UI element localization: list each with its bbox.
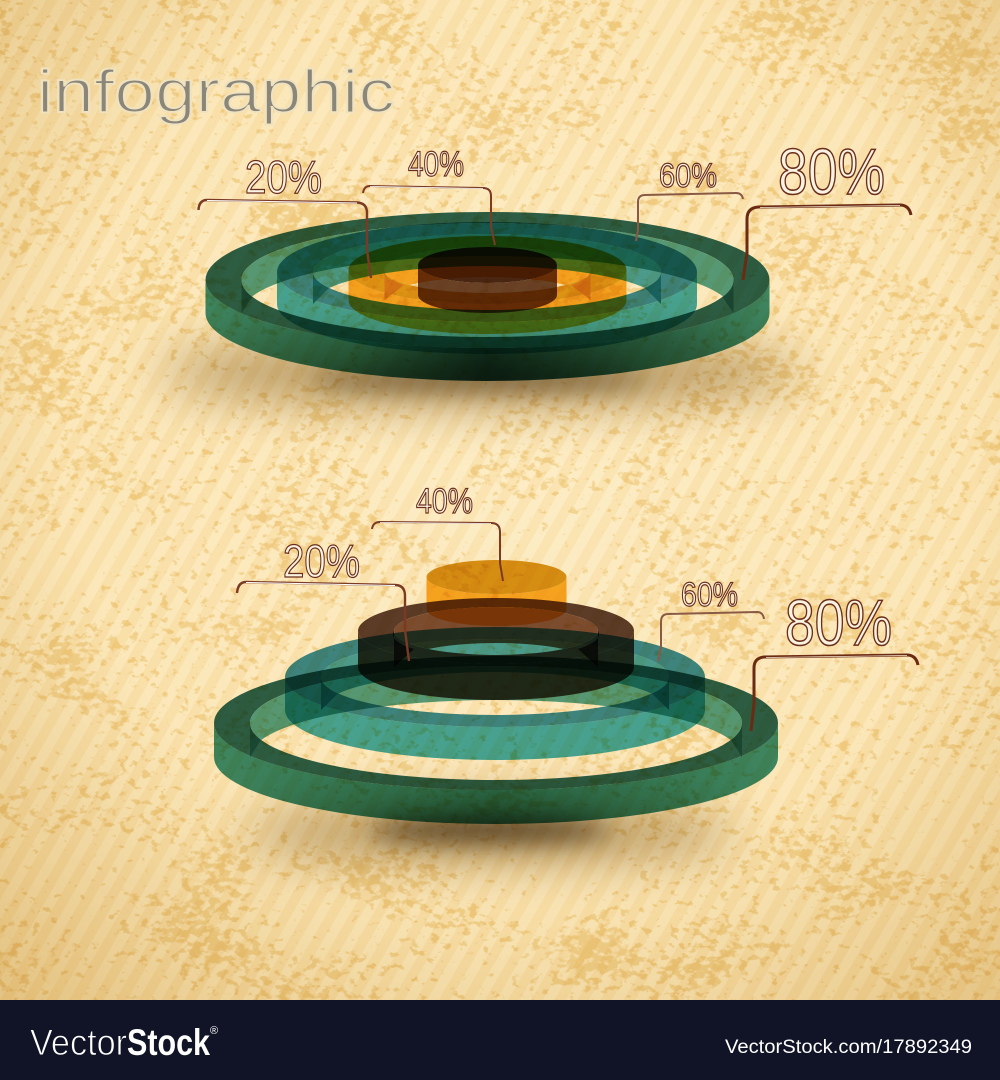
ring: teal 60% — [277, 222, 697, 354]
ring: orange 40% — [348, 236, 626, 334]
ring: outer green 80% — [214, 656, 778, 824]
labels: top chart — [198, 135, 911, 280]
label: 40%: 40% — [408, 145, 464, 184]
footer url: VectorStock.com/17892349 — [725, 1037, 972, 1058]
label: 20%: 20% — [245, 151, 322, 203]
ring: brown 20% — [358, 598, 634, 700]
label: 20%: 20% — [283, 535, 360, 587]
shadow: top chart — [160, 342, 800, 402]
labels: bottom chart — [237, 482, 918, 731]
chart: bottom stacked rings — [214, 560, 778, 824]
chart: top nested rings — [205, 212, 770, 381]
footer logo: VectorStock — [30, 1022, 228, 1063]
label: 40%: 40% — [416, 482, 473, 521]
label: 80% — [751, 586, 918, 731]
cylinder: orange 40% — [426, 560, 566, 626]
footer bar — [0, 1000, 1000, 1080]
footer logo: ® — [210, 1025, 218, 1037]
label: 20% — [237, 535, 409, 661]
label: 60% — [636, 157, 743, 241]
label: 40% — [372, 482, 503, 581]
label: 40% — [363, 145, 495, 245]
label: 60%: 60% — [659, 157, 717, 195]
title: infographic — [37, 58, 395, 125]
label: 80% — [743, 135, 911, 280]
label: 60%: 60% — [681, 576, 738, 614]
ring: outer green 80% — [205, 212, 770, 381]
label: 80%: 80% — [785, 586, 892, 659]
ring: teal 60% — [285, 627, 705, 760]
label: 20% — [198, 151, 371, 278]
label: 80%: 80% — [778, 135, 885, 208]
label: 60% — [658, 576, 764, 661]
cylinder: brown 20% — [418, 247, 557, 313]
shadow: bottom chart — [245, 806, 735, 858]
